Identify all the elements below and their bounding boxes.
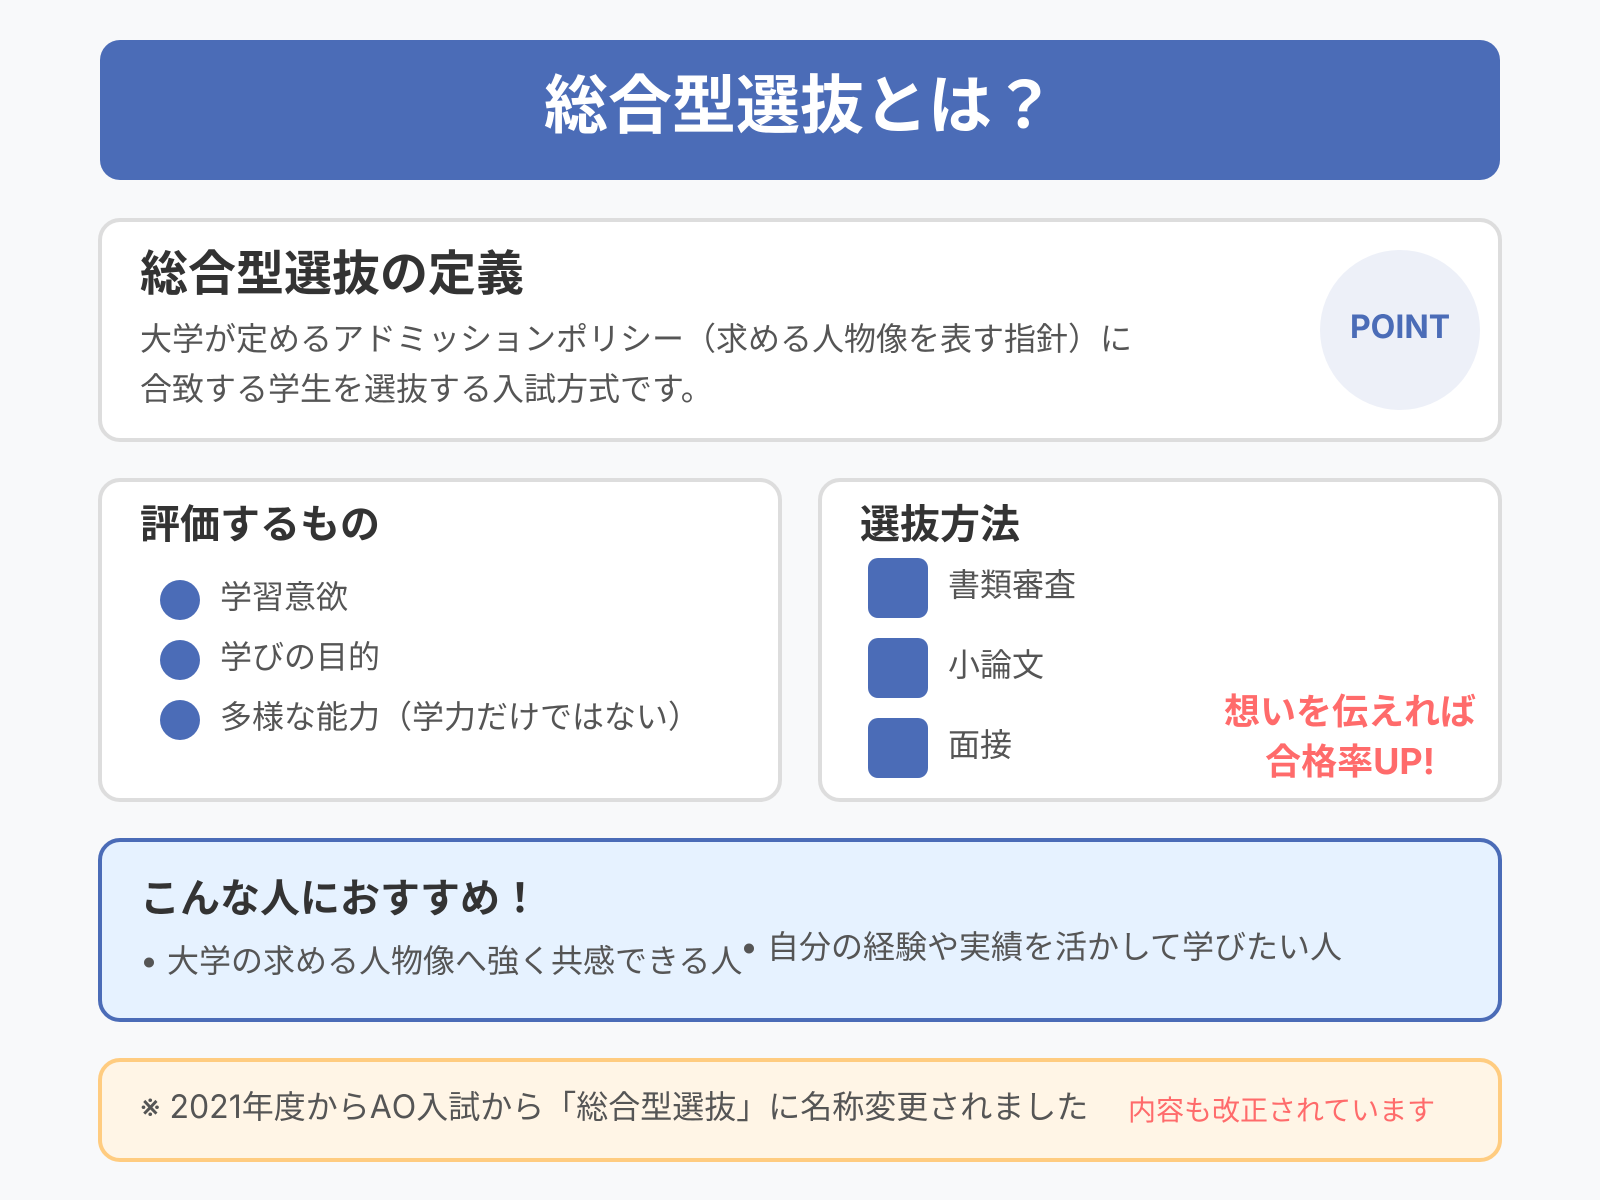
evaluation item: motivation bbox=[160, 577, 348, 620]
point badge: POINT bbox=[1350, 307, 1450, 346]
method: essay bbox=[868, 638, 1044, 698]
panel: recommended for bbox=[100, 840, 1500, 1020]
callout: pass rate bbox=[1224, 689, 1476, 783]
note callout: 内容も改正されています bbox=[1128, 1093, 1435, 1127]
definition body bbox=[140, 319, 1132, 408]
panel: definition bbox=[100, 220, 1500, 440]
title: 総合型選抜とは？ bbox=[544, 67, 1056, 144]
header banner bbox=[100, 40, 1500, 180]
definition body: 合致する学生を選抜する入試方式です。 bbox=[140, 369, 713, 408]
method: interview: 面接 bbox=[948, 725, 1012, 764]
method: essay: 小論文 bbox=[948, 645, 1044, 684]
recommendation two: • 自分の経験や実績を活かして学びたい人 bbox=[740, 927, 1342, 966]
panel: note bbox=[100, 1060, 1500, 1160]
point badge bbox=[1320, 250, 1480, 410]
method: documents bbox=[868, 558, 1076, 618]
selection heading: 選抜方法 bbox=[860, 499, 1020, 548]
callout: pass rate: 想いを伝えれば bbox=[1224, 689, 1476, 733]
method: documents: 書類審査 bbox=[948, 565, 1076, 604]
recommendation heading: こんな人におすすめ！ bbox=[140, 873, 540, 922]
evaluation item: abilities: 多様な能力（学力だけではない） bbox=[220, 697, 700, 736]
panel: selection methods bbox=[820, 480, 1500, 800]
recommendation one: • 大学の求める人物像へ強く共感できる人 bbox=[140, 941, 742, 980]
evaluation item: purpose bbox=[160, 637, 380, 680]
evaluation heading: 評価するもの bbox=[140, 499, 380, 548]
evaluation item: motivation: 学習意欲 bbox=[220, 577, 348, 616]
callout: pass rate: 合格率UP! bbox=[1265, 739, 1435, 783]
note text: ※ 2021年度からAO入試から「総合型選抜」に名称変更されました bbox=[140, 1087, 1088, 1126]
evaluation item: purpose: 学びの目的 bbox=[220, 637, 380, 676]
definition heading: 総合型選抜の定義 bbox=[140, 243, 524, 302]
panel: evaluation bbox=[100, 480, 780, 800]
definition body: 大学が定めるアドミッションポリシー（求める人物像を表す指針）に bbox=[140, 319, 1132, 358]
method: interview bbox=[868, 718, 1012, 778]
